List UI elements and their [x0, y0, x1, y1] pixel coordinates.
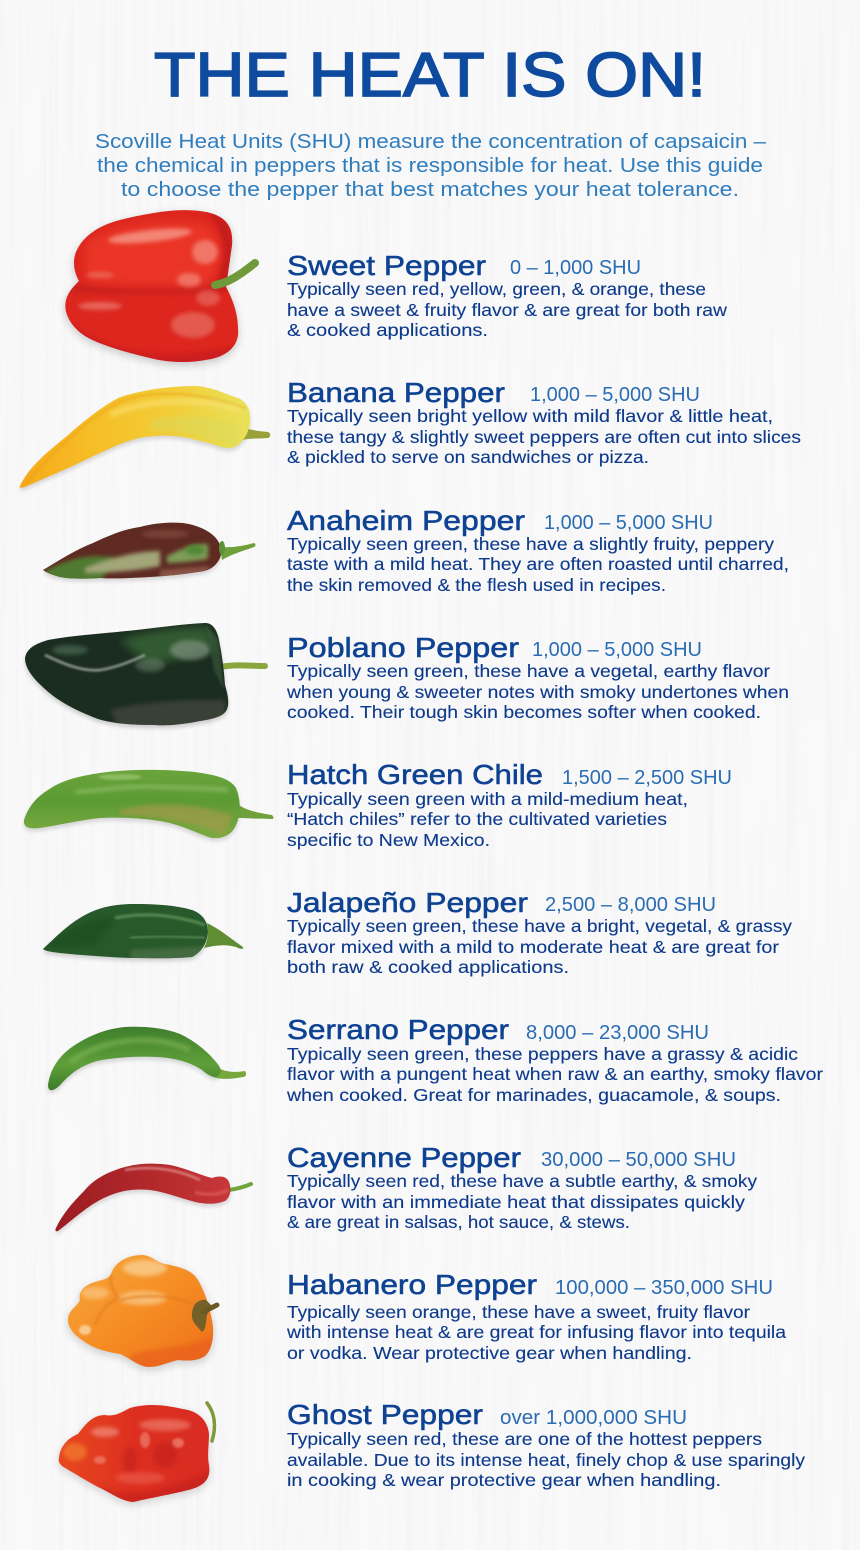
heading: Ghost Pepper: [287, 1399, 483, 1430]
row: banana pepper: [20, 377, 801, 491]
icon: banana pepper: [20, 386, 270, 491]
description: [287, 1171, 757, 1232]
description: Typically seen green, these have a vegetal, earthy flavor: [287, 661, 770, 681]
icon: ghost pepper: [59, 1403, 214, 1510]
description: cooked. Their tough skin becomes softer when cooked.: [287, 702, 761, 722]
description: flavor with a pungent heat when raw & an earthy, smoky flavor: [287, 1064, 823, 1084]
description: available. Due to its intense heat, finely chop & use sparingly: [287, 1450, 805, 1470]
description: Typically seen green, these have a slightly fruity, peppery: [287, 534, 774, 554]
row: cayenne pepper: [55, 1142, 757, 1234]
intro text: the chemical in peppers that is responsible for heat. Use this guide: [97, 155, 763, 177]
heading: Jalapeño Pepper: [287, 887, 528, 918]
SHU range: 8,000 – 23,000 SHU: [526, 1022, 709, 1044]
intro text: Scoville Heat Units (SHU) measure the concentration of capsaicin –: [95, 131, 767, 153]
heading: Sweet Pepper: [287, 250, 486, 281]
row: habanero pepper: [68, 1255, 786, 1370]
row: jalapeño pepper: [43, 887, 792, 977]
description: taste with a mild heat. They are often roasted until charred,: [287, 554, 789, 574]
description: have a sweet & fruity flavor & are great for both raw: [287, 300, 727, 320]
description: Typically seen red, these have a subtle earthy, & smoky: [287, 1171, 757, 1191]
SHU range: 0 – 1,000 SHU: [510, 257, 641, 279]
heading: Serrano Pepper: [287, 1014, 509, 1045]
icon: cayenne pepper: [55, 1164, 251, 1234]
icon: serrano pepper: [48, 1027, 246, 1093]
SHU range: over 1,000,000 SHU: [500, 1407, 687, 1429]
row: serrano pepper: [48, 1014, 823, 1105]
description: flavor with an immediate heat that dissipates quickly: [287, 1192, 745, 1212]
row: anaheim pepper: [43, 505, 789, 595]
row: ghost pepper: [59, 1399, 805, 1510]
description: & pickled to serve on sandwiches or pizza.: [287, 447, 649, 467]
description: “Hatch chiles” refer to the cultivated varieties: [287, 809, 667, 829]
heading: Banana Pepper: [287, 377, 505, 408]
SHU range: 100,000 – 350,000 SHU: [555, 1277, 773, 1299]
description: the skin removed & the flesh used in recipes.: [287, 575, 666, 595]
description: [287, 534, 789, 595]
description: specific to New Mexico.: [287, 830, 490, 850]
row: poblano pepper: [25, 623, 789, 730]
row: hatch green chile: [24, 759, 732, 850]
intro text: to choose the pepper that best matches your heat tolerance.: [121, 179, 739, 201]
icon: habanero pepper: [68, 1255, 217, 1370]
description: [287, 916, 792, 977]
description: Typically seen red, these are one of the hottest peppers: [287, 1429, 762, 1449]
heading: Cayenne Pepper: [287, 1142, 521, 1173]
description: or vodka. Wear protective gear when handling.: [287, 1343, 692, 1363]
SHU range: 1,000 – 5,000 SHU: [544, 512, 713, 534]
description: [286, 661, 789, 722]
icon: hatch green chile: [24, 770, 273, 841]
icon: poblano pepper: [25, 623, 265, 730]
description: with intense heat & are great for infusing flavor into tequila: [286, 1322, 786, 1342]
description: Typically seen orange, these have a sweet, fruity flavor: [287, 1302, 750, 1322]
description: & cooked applications.: [287, 320, 488, 340]
description: Typically seen green with a mild-medium heat,: [287, 789, 688, 809]
description: [286, 1044, 823, 1105]
description: when young & sweeter notes with smoky undertones when: [286, 682, 789, 702]
heading: Habanero Pepper: [287, 1269, 537, 1300]
stem: [192, 1300, 217, 1332]
SHU range: 2,500 – 8,000 SHU: [545, 894, 716, 916]
SHU range: 1,000 – 5,000 SHU: [530, 384, 700, 406]
description: these tangy & slightly sweet peppers are often cut into slices: [287, 427, 801, 447]
description: [287, 789, 688, 850]
description: in cooking & wear protective gear when handling.: [287, 1470, 721, 1490]
description: when cooked. Great for marinades, guacamole, & soups.: [286, 1085, 781, 1105]
icon: sweet pepper: [60, 208, 255, 370]
heading: Anaheim Pepper: [287, 505, 525, 536]
description: [286, 1302, 786, 1363]
description: Typically seen green, these have a bright, vegetal, & grassy: [287, 916, 792, 936]
SHU range: 1,500 – 2,500 SHU: [562, 767, 732, 789]
SHU range: 30,000 – 50,000 SHU: [541, 1149, 736, 1171]
description: [287, 279, 727, 340]
description: flavor mixed with a mild to moderate heat & are great for: [287, 937, 779, 957]
heading: Hatch Green Chile: [287, 759, 543, 790]
row: sweet pepper: [60, 208, 727, 370]
icon: anaheim pepper: [43, 523, 256, 582]
description: & are great in salsas, hot sauce, & stews.: [287, 1212, 630, 1232]
heading: Poblano Pepper: [287, 632, 519, 663]
intro text: [95, 131, 767, 201]
description: Typically seen red, yellow, green, & orange, these: [287, 279, 706, 299]
icon: jalapeño pepper: [43, 904, 243, 962]
description: [287, 1429, 805, 1490]
SHU range: 1,000 – 5,000 SHU: [532, 639, 702, 661]
title: THE HEAT IS ON!: [154, 41, 706, 110]
description: Typically seen bright yellow with mild flavor & little heat,: [287, 406, 773, 426]
description: [287, 406, 801, 467]
description: Typically seen green, these peppers have a grassy & acidic: [287, 1044, 798, 1064]
description: both raw & cooked applications.: [287, 957, 569, 977]
